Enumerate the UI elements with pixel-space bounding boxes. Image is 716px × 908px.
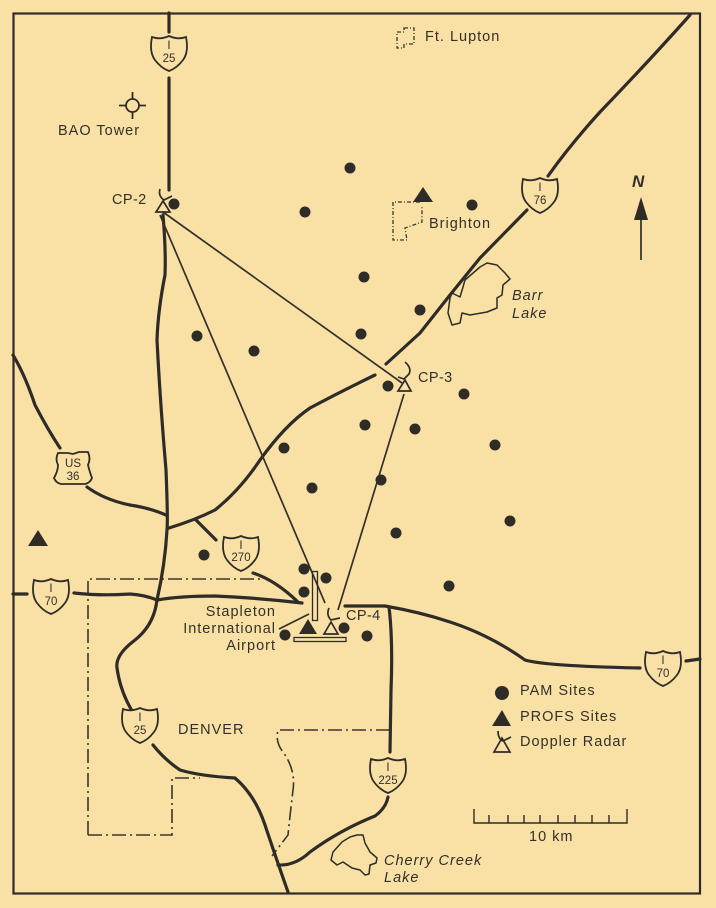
radar CP-4 icon bbox=[324, 608, 340, 634]
shield: I-76: 76 bbox=[534, 195, 546, 207]
highway I-25 bbox=[117, 13, 288, 892]
shield: I-270 bbox=[223, 536, 259, 571]
shield: US 36 bbox=[54, 452, 92, 484]
highway I-76 bbox=[169, 15, 690, 528]
legend: Doppler Radar: Doppler Radar bbox=[520, 734, 627, 750]
shield: I-270: 270 bbox=[231, 552, 251, 564]
shield: I-76: I bbox=[538, 182, 542, 194]
label: DENVER: DENVER bbox=[178, 722, 244, 738]
label: Barr Lake: Barr bbox=[512, 288, 543, 304]
label: Ft. Lupton: Ft. Lupton bbox=[425, 29, 500, 45]
label: CP-2: CP-2 bbox=[112, 192, 147, 208]
shield: I-225: I bbox=[386, 762, 390, 774]
north arrow: N bbox=[632, 172, 645, 191]
shield: I-70 east: 70 bbox=[657, 668, 669, 680]
legend: PAM Sites: PAM Sites bbox=[520, 683, 596, 699]
shield: I-270: I bbox=[239, 540, 243, 552]
legend bbox=[492, 683, 627, 752]
shield: I-70 west: 70 bbox=[45, 596, 57, 608]
highway I-270 bbox=[196, 520, 298, 602]
label: Cherry Creek Lake: Lake bbox=[384, 870, 419, 886]
scale bar bbox=[474, 809, 627, 845]
shield: I-225 bbox=[370, 758, 406, 793]
shield: I-25 north: 25 bbox=[163, 53, 175, 65]
shield: I-25 south bbox=[122, 708, 158, 743]
highway I-70 bbox=[13, 593, 700, 668]
shield: I-70 west bbox=[33, 579, 69, 614]
PAM site dots bbox=[168, 162, 516, 642]
airport runways bbox=[279, 572, 346, 642]
legend: PROFS Sites: PROFS Sites bbox=[520, 709, 617, 725]
label: BAO Tower: BAO Tower bbox=[58, 123, 140, 139]
north arrow bbox=[632, 172, 648, 260]
radar CP-3 icon bbox=[398, 362, 411, 391]
PROFS site triangles bbox=[28, 187, 433, 634]
label: Barr Lake: Lake bbox=[512, 306, 547, 322]
label: CP-4: CP-4 bbox=[346, 608, 381, 624]
shield: US 36: 36 bbox=[67, 471, 79, 483]
shield: I-70 east: I bbox=[661, 655, 665, 667]
label: Stapleton International Airport: Airport bbox=[226, 638, 276, 654]
Brighton town boundary bbox=[393, 202, 422, 240]
Denver city boundary bbox=[88, 579, 390, 856]
label: Cherry Creek Lake: Cherry Creek bbox=[384, 853, 482, 869]
label: Brighton: Brighton bbox=[429, 216, 491, 232]
label: CP-3: CP-3 bbox=[418, 370, 453, 386]
shield: US 36: US bbox=[65, 458, 81, 470]
shield: I-25 north bbox=[151, 36, 187, 71]
shield: I-25 south: I bbox=[138, 712, 142, 724]
BAO Tower icon bbox=[119, 92, 146, 119]
shield: I-25 south: 25 bbox=[134, 725, 146, 737]
shield: I-76 bbox=[522, 178, 558, 213]
shield: I-70 east bbox=[645, 651, 681, 686]
label: Stapleton International Airport: Stapleton bbox=[206, 604, 276, 620]
radar CP-2 icon bbox=[156, 189, 172, 212]
label: Stapleton International Airport: International bbox=[183, 621, 276, 637]
shield: I-225: 225 bbox=[378, 775, 398, 787]
place labels bbox=[58, 29, 547, 886]
highway US 36 bbox=[13, 355, 166, 515]
highway I-225 bbox=[278, 607, 392, 865]
shield: I-70 west: I bbox=[49, 583, 53, 595]
scale label: 10 km bbox=[529, 829, 574, 845]
Barr Lake bbox=[448, 263, 510, 325]
shield: I-25 north: I bbox=[167, 40, 171, 52]
Cherry Creek Lake bbox=[331, 835, 377, 875]
radar baselines bbox=[160, 212, 404, 610]
Ft. Lupton town boundary bbox=[397, 28, 414, 48]
